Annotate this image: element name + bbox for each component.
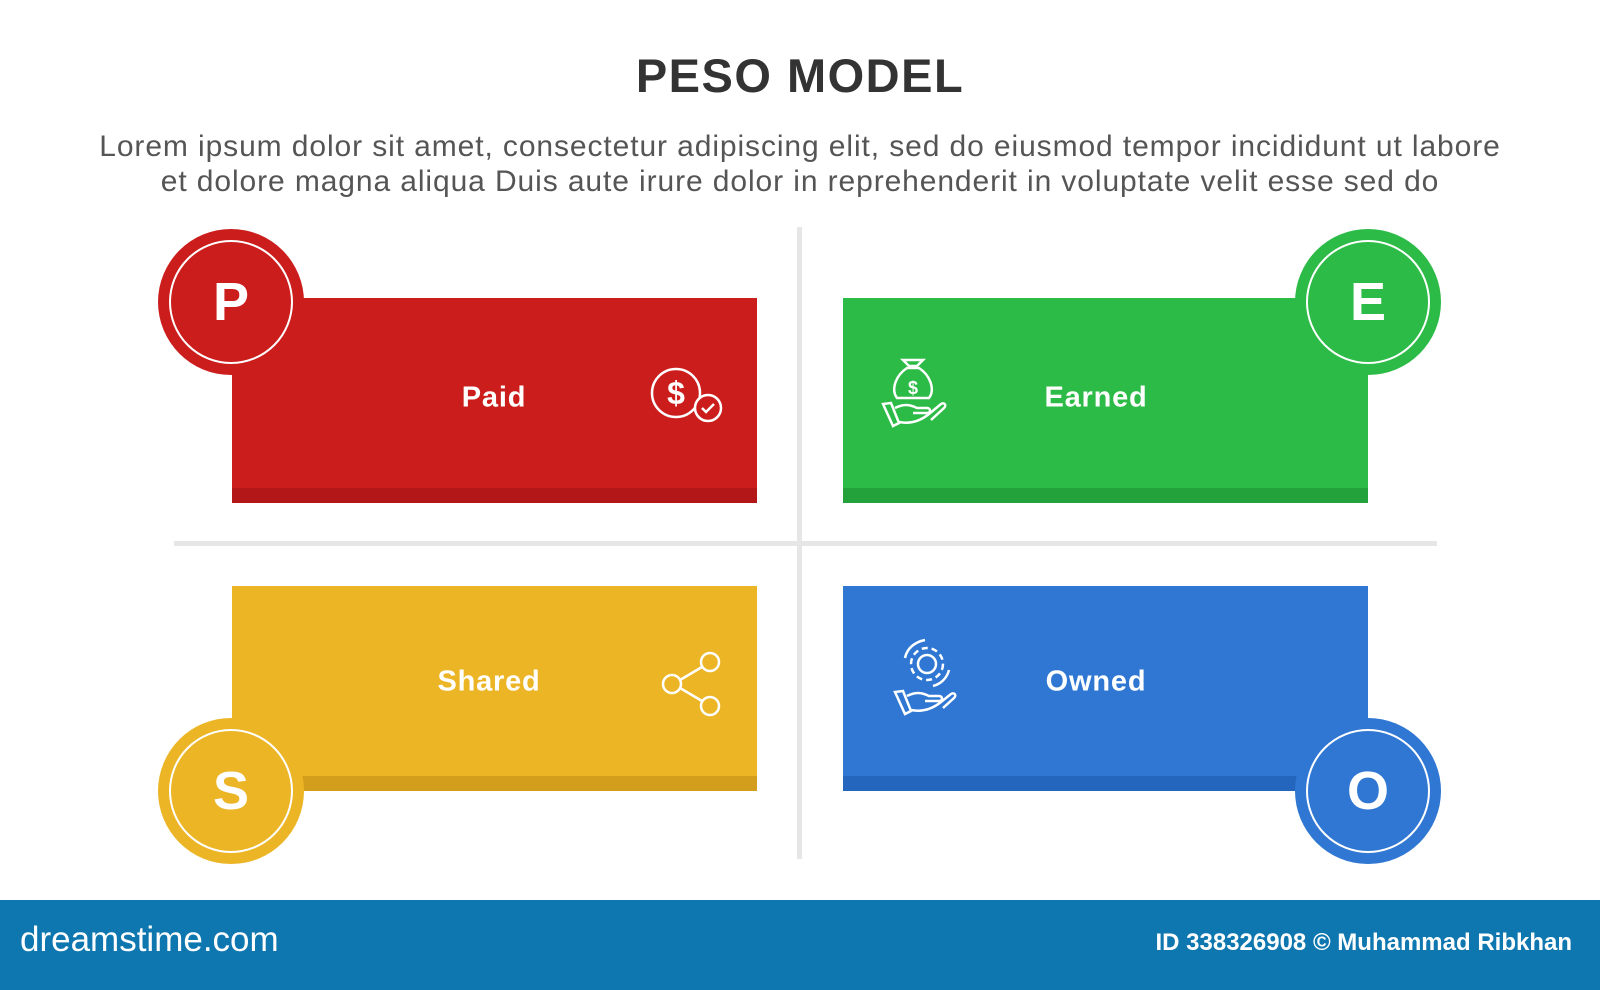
footer: id credit: ID 338326908 © Muhammad Ribkhan [1155, 929, 1572, 956]
panel: shared [232, 586, 757, 791]
circle: P: P [213, 272, 249, 332]
footer bar [0, 900, 1600, 990]
panel: owned [843, 586, 1368, 791]
icon: dollar check: $ [667, 375, 685, 411]
subtitle text [99, 130, 1501, 198]
label: Earned: Earned [1044, 382, 1148, 414]
icon: gear hand [893, 638, 956, 716]
icon: share [662, 652, 720, 716]
circle: P [158, 229, 304, 375]
subtitle text: Lorem ipsum dolor sit amet, consectetur adipiscing elit, sed do eiusmod tempor incididunt ut labore [99, 130, 1501, 163]
panel: earned [843, 298, 1368, 503]
circle: S [158, 718, 304, 864]
title: PESO MODEL [636, 49, 964, 102]
panel: paid [232, 298, 757, 503]
footer: brand: dreamstime.com [20, 920, 279, 959]
subtitle text: et dolore magna aliqua Duis aute irure dolor in reprehenderit in voluptate velit esse sed do [161, 165, 1439, 198]
icon: money bag hand [881, 358, 946, 428]
label: Owned: Owned [1046, 666, 1146, 698]
icon: money bag hand: $ [908, 378, 918, 398]
icon: dollar check [650, 368, 722, 422]
label: Shared: Shared [437, 666, 541, 698]
circle: E [1295, 229, 1441, 375]
circle: O: O [1347, 761, 1389, 821]
circle: E: E [1350, 272, 1386, 332]
circle: O [1295, 718, 1441, 864]
label: Paid: Paid [462, 382, 526, 414]
circle: S: S [213, 761, 249, 821]
